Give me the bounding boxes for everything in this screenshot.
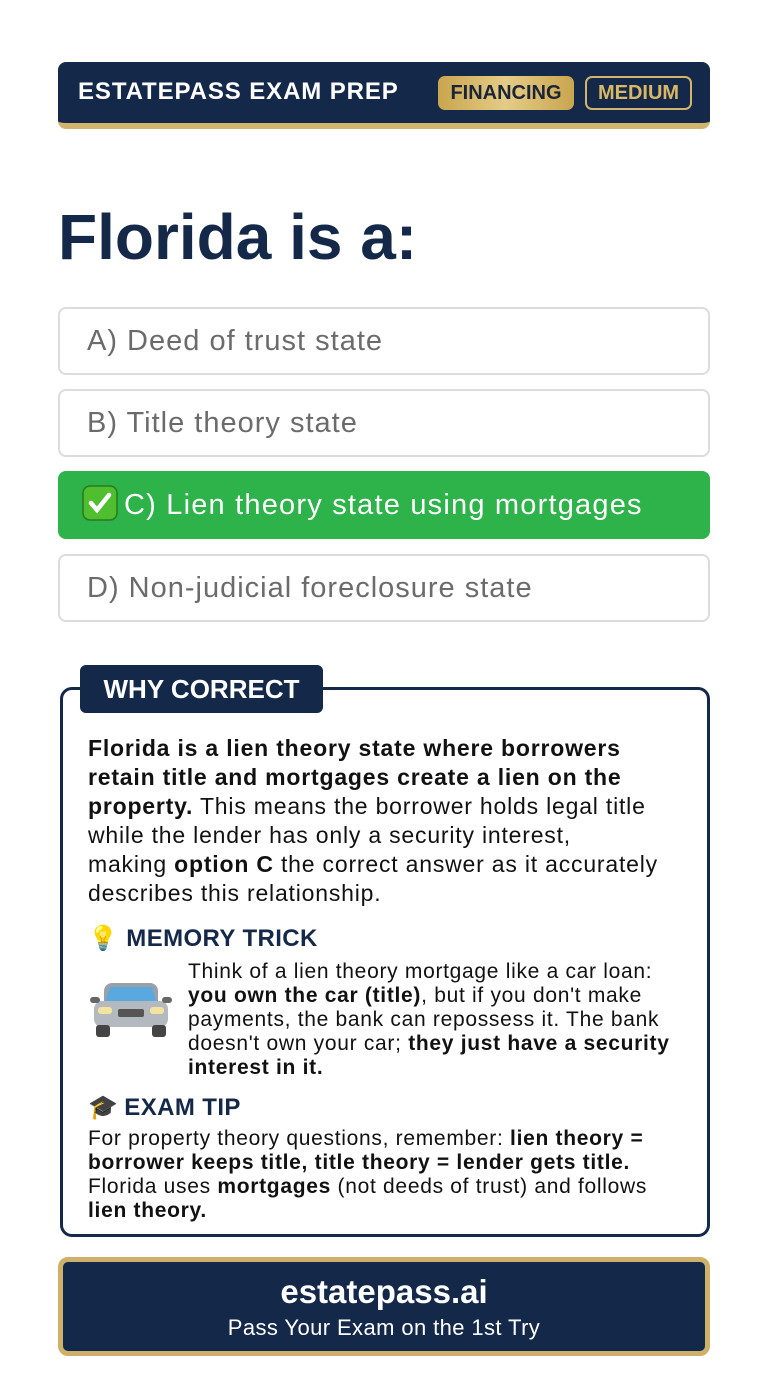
exam tip text: borrower keeps title, title theory = lender gets title. — [88, 1151, 630, 1174]
memory trick text — [188, 960, 670, 1079]
option A — [58, 307, 710, 375]
option D — [58, 554, 710, 622]
footer tagline: Pass Your Exam on the 1st Try — [228, 1315, 540, 1340]
memory trick text: payments, the bank can repossess it. The bank — [188, 1008, 659, 1031]
explanation text: retain title and mortgages create a lien on the — [88, 764, 622, 790]
exam tip text: Florida uses mortgages (not deeds of trust) and follows — [88, 1175, 647, 1198]
memory trick text: interest in it. — [188, 1056, 323, 1079]
explanation text: while the lender has only a security interest, — [88, 822, 571, 848]
icon: car — [90, 983, 172, 1037]
header title: ESTATEPASS EXAM PREP — [78, 78, 399, 105]
exam tip text — [88, 1127, 647, 1222]
option C correct — [58, 471, 710, 539]
tab: why correct — [80, 665, 323, 713]
panel: why correct — [60, 687, 710, 1237]
title: Florida is a: — [58, 201, 417, 273]
memory trick text: doesn't own your car; they just have a security — [188, 1032, 670, 1055]
footer brand: estatepass.ai — [280, 1273, 488, 1310]
badge: medium: MEDIUM — [598, 82, 679, 104]
explanation text: describes this relationship. — [88, 880, 381, 906]
memory trick heading: 💡 MEMORY TRICK — [88, 925, 318, 952]
option A: A) Deed of trust state — [87, 325, 383, 357]
badge: financing — [438, 76, 574, 110]
explanation text: making option C the correct answer as it accurately — [88, 851, 658, 877]
footer — [58, 1257, 710, 1356]
option B: B) Title theory state — [87, 407, 358, 439]
badge: financing: FINANCING — [450, 82, 562, 104]
memory trick text: Think of a lien theory mortgage like a car loan: — [188, 960, 652, 983]
explanation text — [88, 735, 658, 906]
option C correct: C) Lien theory state using mortgages — [124, 489, 643, 521]
option B — [58, 389, 710, 457]
exam tip text: lien theory. — [88, 1199, 207, 1222]
tab: why correct: WHY CORRECT — [104, 674, 299, 704]
exam tip text: For property theory questions, remember: lien theory = — [88, 1127, 643, 1150]
option D: D) Non-judicial foreclosure state — [87, 572, 533, 604]
header bar — [58, 62, 710, 129]
explanation text: property. This means the borrower holds legal title — [88, 793, 646, 819]
explanation text: Florida is a lien theory state where borrowers — [88, 735, 621, 761]
badge: medium — [585, 76, 692, 110]
exam tip heading: 🎓EXAM TIP — [88, 1094, 241, 1121]
memory trick text: you own the car (title), but if you don't make — [188, 984, 642, 1007]
